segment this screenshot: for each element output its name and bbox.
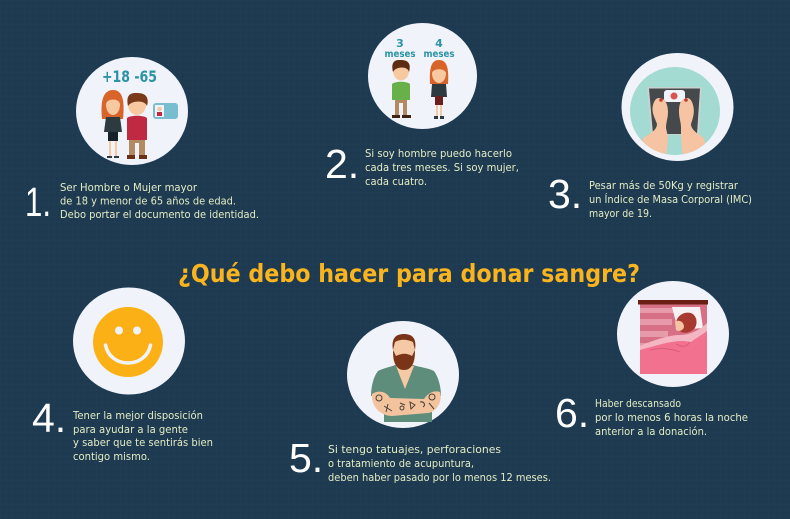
text block 5 xyxy=(328,443,551,484)
text block 3 xyxy=(589,179,752,220)
icon: smiley face xyxy=(73,288,185,394)
text block 5: deben haber pasado por lo menos 12 meses. xyxy=(328,471,551,484)
panel: requirement 3, weight xyxy=(548,53,752,220)
text block 5: o tratamiento de acupuntura, xyxy=(328,457,474,470)
number 6: 6. xyxy=(555,390,589,436)
number 2: 2. xyxy=(325,141,359,187)
icon: woman sleeping in bed xyxy=(617,281,729,387)
text block 4: y saber que te sentirás bien xyxy=(73,436,213,449)
panel: requirement 1, age and ID xyxy=(25,57,259,225)
panel: requirement 5, tattoos xyxy=(289,321,551,484)
text block 6: Haber descansado xyxy=(595,397,681,410)
icon: bearded man with tattoos xyxy=(347,321,459,428)
panel: requirement 4, attitude xyxy=(32,288,213,463)
text block 3: mayor de 19. xyxy=(589,207,652,220)
icon: man 3 months and woman 4 months: 3 xyxy=(396,37,404,50)
text block 1: Ser Hombre o Mujer mayor xyxy=(60,181,197,194)
icon: man 3 months and woman 4 months: 4 xyxy=(435,37,443,50)
text block 6: por lo menos 6 horas la noche xyxy=(595,411,748,424)
text block 4: para ayudar a la gente xyxy=(73,423,188,436)
text block 2: Si soy hombre puedo hacerlo xyxy=(365,147,512,160)
icon: man 3 months and woman 4 months: meses xyxy=(384,49,416,60)
text block 2 xyxy=(365,147,519,188)
text block 4: contigo mismo. xyxy=(73,450,150,463)
text block 1: Debo portar el documento de identidad. xyxy=(60,208,259,221)
panel: requirement 2, frequency xyxy=(325,23,519,188)
panel: requirement 6, rest xyxy=(555,281,748,438)
text block 2: cada cuatro. xyxy=(365,175,427,188)
icon: feet on a scale xyxy=(622,53,734,161)
text block 1 xyxy=(60,181,259,221)
text block 4: Tener la mejor disposición xyxy=(72,409,203,422)
number 4: 4. xyxy=(32,395,66,441)
text block 3: Pesar más de 50Kg y registrar xyxy=(589,179,738,192)
text block 3: un Índice de Masa Corporal (IMC) xyxy=(589,193,752,206)
number 1: 1. xyxy=(25,179,51,225)
icon: man and woman with ID card xyxy=(76,57,188,165)
text block 2: cada tres meses. Si soy mujer, xyxy=(365,161,519,174)
text block 4 xyxy=(72,409,213,463)
icon: man and woman with ID card: +18 -65 xyxy=(102,67,157,86)
icon: man 3 months and woman 4 months xyxy=(368,23,477,129)
text block 5: Si tengo tatuajes, perforaciones xyxy=(328,443,501,456)
text block 6 xyxy=(595,397,748,438)
text block 6: anterior a la donación. xyxy=(595,425,707,438)
number 3: 3. xyxy=(548,171,582,217)
icon: man 3 months and woman 4 months: meses xyxy=(424,49,455,60)
number 5: 5. xyxy=(289,435,323,481)
text block 1: de 18 y menor de 65 años de edad. xyxy=(60,194,236,208)
title: ¿Qué debo hacer para donar sangre? xyxy=(178,259,640,288)
